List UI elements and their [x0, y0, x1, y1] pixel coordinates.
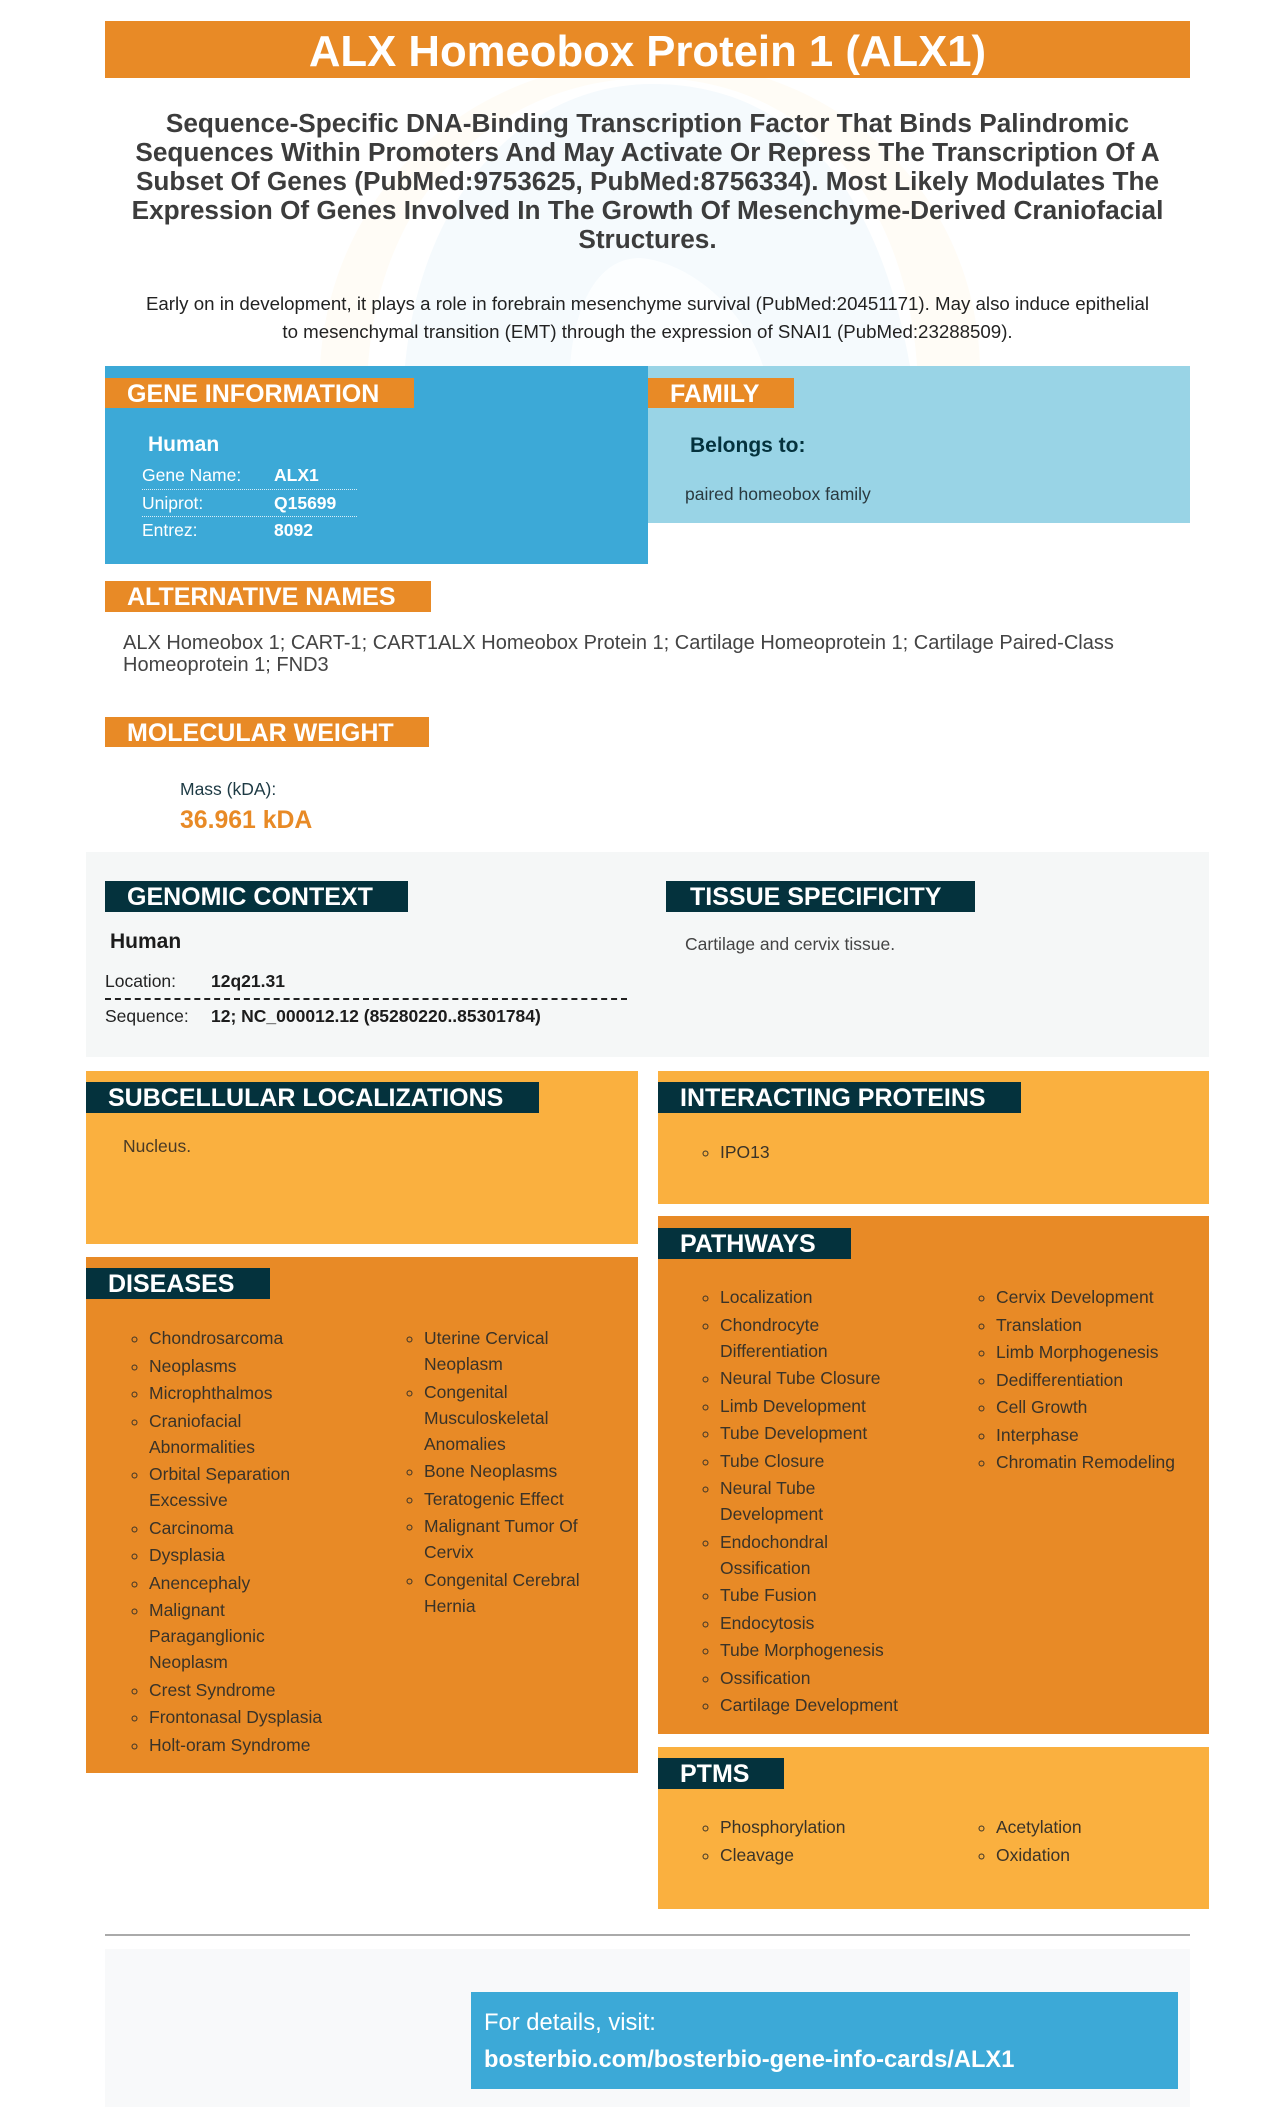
- pathway list column one: Tube Development: [720, 1423, 867, 1443]
- disease list column two: Uterine Cervical: [424, 1328, 548, 1348]
- heading: gene information: GENE INFORMATION: [127, 380, 379, 408]
- gene identifier table: Uniprot:: [142, 493, 203, 513]
- disease list column one: Chondrosarcoma: [149, 1328, 283, 1348]
- PTM list column two: [978, 1817, 1082, 1864]
- heading: tissue specificity: TISSUE SPECIFICITY: [690, 883, 941, 911]
- subtitle summary: Sequences Within Promoters And May Activate Or Repress The Transcription Of A: [135, 137, 1160, 167]
- disease list column two: [406, 1328, 580, 1616]
- disease list column one: Dysplasia: [149, 1545, 225, 1565]
- panel: gene information: [105, 366, 648, 564]
- PTM list column one: Phosphorylation: [720, 1817, 846, 1837]
- callout: details link: bosterbio.com/bosterbio-gene-info-cards/ALX1: [484, 2047, 1014, 2073]
- pathway list column one: [702, 1287, 898, 1715]
- genomic location table: [105, 971, 627, 1026]
- panel: footer: [105, 1949, 1190, 2107]
- family name: paired homeobox family: [685, 484, 871, 504]
- pathway list column one: Cartilage Development: [720, 1695, 898, 1715]
- belongs to label: Belongs to:: [690, 434, 806, 457]
- heading: diseases: [86, 1268, 270, 1299]
- disease list column one: Malignant: [149, 1600, 225, 1620]
- tissue specificity text: Cartilage and cervix tissue.: [685, 934, 895, 954]
- disease list column two: Hernia: [424, 1596, 476, 1616]
- disease list column one: Excessive: [149, 1490, 228, 1510]
- PTM list column two: Acetylation: [996, 1817, 1082, 1837]
- pathway list column two: Dedifferentiation: [996, 1370, 1123, 1390]
- disease list column two: Malignant Tumor Of: [424, 1516, 578, 1536]
- heading: interacting proteins: INTERACTING PROTEINS: [680, 1084, 986, 1112]
- panel: interacting proteins: [658, 1071, 1209, 1204]
- pathway list column one: Neural Tube: [720, 1478, 815, 1498]
- pathway list column one: Localization: [720, 1287, 812, 1307]
- pathway list column one: Differentiation: [720, 1340, 828, 1360]
- PTM list column one: Cleavage: [720, 1844, 794, 1864]
- disease list column one: Orbital Separation: [149, 1464, 290, 1484]
- pathway list column one: Tube Fusion: [720, 1585, 817, 1605]
- PTM list column two: Oxidation: [996, 1844, 1070, 1864]
- heading: molecular weight: MOLECULAR WEIGHT: [127, 719, 394, 747]
- species label: Human: [110, 930, 181, 953]
- callout: details link: For details, visit:: [484, 2009, 656, 2036]
- disease list column one: Crest Syndrome: [149, 1680, 275, 1700]
- alternative names text: Homeoprotein 1; FND3: [123, 654, 329, 676]
- gene identifier table: Q15699: [274, 493, 336, 513]
- subtitle summary: Expression Of Genes Involved In The Growth Of Mesenchyme-Derived Craniofacial: [132, 195, 1163, 225]
- disease list column two: Congenital Cerebral: [424, 1570, 580, 1590]
- heading: subcellular localizations: SUBCELLULAR LOCALIZATIONS: [108, 1084, 503, 1112]
- pathway list column two: Limb Morphogenesis: [996, 1342, 1158, 1362]
- disease list column one: Neoplasms: [149, 1356, 237, 1376]
- description paragraph: Early on in development, it plays a role in forebrain mesenchyme survival (PubMed:20451171). May also induce epithelial: [146, 293, 1149, 314]
- pathway list column one: Development: [720, 1504, 823, 1524]
- pathway list column two: Cervix Development: [996, 1287, 1154, 1307]
- title banner: [105, 21, 1190, 78]
- pathway list column one: Limb Development: [720, 1396, 866, 1416]
- pathway list column one: Chondrocyte: [720, 1314, 819, 1334]
- protein list: IPO13: [720, 1142, 770, 1162]
- heading: alternative names: ALTERNATIVE NAMES: [127, 583, 396, 611]
- gene identifier table: ALX1: [274, 465, 319, 485]
- heading: family: [648, 378, 794, 408]
- disease list column one: [132, 1328, 322, 1754]
- disease list column two: Cervix: [424, 1542, 474, 1562]
- subtitle summary: Sequence-Specific DNA-Binding Transcription Factor That Binds Palindromic: [166, 108, 1129, 138]
- disease list column one: Anencephaly: [149, 1572, 250, 1592]
- panel: subcellular localizations: [86, 1071, 638, 1244]
- disease list column two: Bone Neoplasms: [424, 1461, 557, 1481]
- watermark logo: [320, 78, 980, 366]
- disease list column two: Teratogenic Effect: [424, 1488, 564, 1508]
- disease list column one: Holt-oram Syndrome: [149, 1734, 310, 1754]
- genomic location table: Location:: [105, 971, 176, 991]
- gene identifier table: 8092: [274, 520, 313, 540]
- pathway list column one: Endocytosis: [720, 1612, 814, 1632]
- pathway list column one: Neural Tube Closure: [720, 1368, 880, 1388]
- species label: Human: [148, 433, 219, 456]
- disease list column one: Neoplasm: [149, 1652, 228, 1672]
- pathway list column two: Interphase: [996, 1424, 1079, 1444]
- PTM list column one: [702, 1817, 846, 1864]
- pathway list column one: Tube Morphogenesis: [720, 1640, 884, 1660]
- disease list column two: Musculoskeletal: [424, 1408, 548, 1428]
- panel: family: [648, 366, 1190, 523]
- disease list column one: Paraganglionic: [149, 1626, 265, 1646]
- mass label: Mass (kDA):: [180, 779, 276, 799]
- title banner: ALX Homeobox Protein 1 (ALX1): [309, 27, 986, 76]
- subtitle summary: Subset Of Genes (PubMed:9753625, PubMed:8756334). Most Likely Modulates The: [136, 166, 1159, 196]
- panel: PTMs: [658, 1747, 1209, 1909]
- gene identifier table: Gene Name:: [142, 465, 241, 485]
- disease list column one: Abnormalities: [149, 1436, 255, 1456]
- pathway list column two: Cell Growth: [996, 1397, 1087, 1417]
- description paragraph: to mesenchymal transition (EMT) through the expression of SNAI1 (PubMed:23288509).: [282, 321, 1013, 342]
- disease list column two: Congenital: [424, 1382, 508, 1402]
- pathway list column one: Ossification: [720, 1558, 810, 1578]
- pathway list column two: Translation: [996, 1314, 1082, 1334]
- gene identifier table: [142, 465, 357, 540]
- genomic location table: 12q21.31: [211, 971, 285, 991]
- heading: genomic context: GENOMIC CONTEXT: [127, 883, 373, 911]
- panel: diseases: [86, 1257, 638, 1773]
- description paragraph: [146, 293, 1149, 342]
- pathway list column one: Endochondral: [720, 1532, 828, 1552]
- pathway list column two: Chromatin Remodeling: [996, 1452, 1175, 1472]
- subtitle summary: Structures.: [578, 224, 717, 254]
- heading: PTMs: PTMS: [680, 1760, 749, 1788]
- heading: PTMs: [658, 1758, 784, 1789]
- disease list column two: Neoplasm: [424, 1354, 503, 1374]
- disease list column one: Craniofacial: [149, 1410, 241, 1430]
- callout: details link: [471, 1992, 1178, 2089]
- pathway list column one: Tube Closure: [720, 1450, 824, 1470]
- panel: genomic context and tissue specificity: [86, 852, 1209, 1057]
- alternative names text: [123, 632, 1114, 676]
- subtitle summary: [132, 108, 1163, 254]
- genomic location table: Sequence:: [105, 1006, 189, 1026]
- disease list column one: Carcinoma: [149, 1518, 234, 1538]
- heading: diseases: DISEASES: [108, 1270, 234, 1298]
- genomic location table: 12; NC_000012.12 (85280220..85301784): [211, 1006, 541, 1026]
- disease list column one: Microphthalmos: [149, 1383, 273, 1403]
- disease list column one: Frontonasal Dysplasia: [149, 1707, 322, 1727]
- panel: pathways: [658, 1216, 1209, 1734]
- mass value: 36.961 kDA: [180, 807, 312, 834]
- heading: pathways: PATHWAYS: [680, 1230, 816, 1258]
- heading: family: FAMILY: [670, 380, 759, 408]
- disease list column two: Anomalies: [424, 1434, 506, 1454]
- pathway list column one: Ossification: [720, 1668, 810, 1688]
- pathway list column two: [978, 1287, 1175, 1472]
- heading: pathways: [658, 1228, 851, 1259]
- alternative names text: ALX Homeobox 1; CART-1; CART1ALX Homeobox Protein 1; Cartilage Homeoprotein 1; Cartilage Paired-Class: [123, 632, 1114, 654]
- gene identifier table: Entrez:: [142, 520, 197, 540]
- localization text: Nucleus.: [123, 1136, 191, 1156]
